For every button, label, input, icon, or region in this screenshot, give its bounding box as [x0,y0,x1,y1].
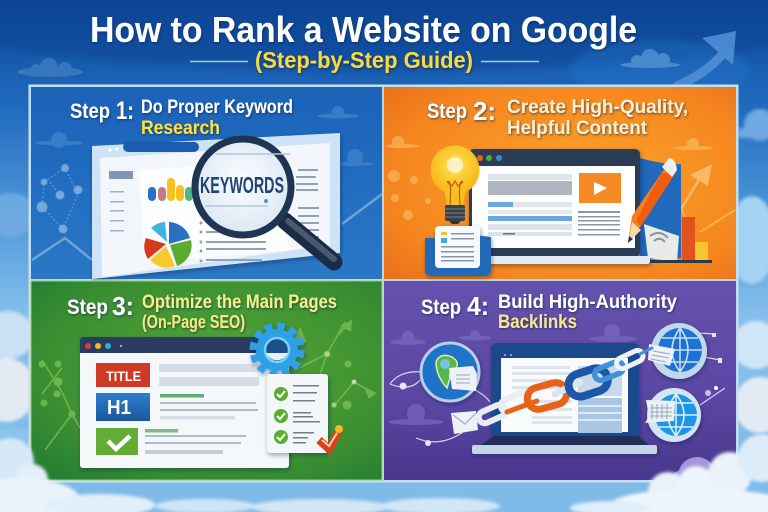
network lines [390,333,725,442]
folder with paper [425,226,491,276]
laptop [465,149,650,264]
step 1 label [70,97,293,139]
panel: step 4 backlinks [384,281,736,495]
step 4 label: Step [421,296,461,319]
document and chart bars [644,217,712,263]
list rows [200,169,319,262]
video thumbnail [579,173,621,203]
step 3 label: Optimize the Main Pages [142,292,337,313]
title tag block: TITLE [106,368,141,384]
panel frame [30,86,738,482]
right bottom globe [647,388,701,442]
side clouds [0,109,768,452]
foreground clouds along the bottom [0,434,768,512]
dashboard window [92,133,340,279]
step 2 label: Step [427,100,467,123]
step 3 label: (On-Page SEO) [142,312,245,332]
panel: step 1 keyword research [31,87,382,279]
blue folder behind laptop [640,158,681,260]
title tag block [96,363,150,387]
step 1 label: 1: [116,97,134,125]
decorative green network [39,320,376,450]
calendar note [645,400,675,423]
step 4 label: Build High-Authority [498,292,677,313]
browser window [80,337,289,468]
right top globe [651,323,707,379]
envelope [451,411,478,434]
content lines on screen [488,174,572,236]
subtitle: (Step-by-Step Guide) [255,47,473,73]
title: How to Rank a Website on Google [90,9,637,50]
magnifying glass: KEYWORDS [200,172,284,198]
step 3 label: 3: [112,291,134,321]
left globe with folder [421,343,479,401]
screen layout [512,366,622,433]
step 1 label: Do Proper Keyword [141,97,293,118]
step 1 label: Research [141,118,220,139]
text rows [145,364,259,454]
panel: step 3 on-page SEO [31,281,382,480]
text lines beside video [578,211,620,236]
step 1 label: Step [70,100,110,123]
gear [253,326,301,374]
checklist card [267,374,328,453]
decorative clouds panel 1 [35,106,374,166]
pencil [628,158,677,243]
H1 block [96,393,150,421]
sidebar [109,171,133,232]
cloud top left [17,58,83,77]
step 3 label [67,291,337,332]
pie chart [144,222,192,268]
top right note [648,344,675,366]
step 2 label: 2: [473,96,496,126]
step 2 label: Helpful Content [507,118,648,139]
decorative elements panel 2 [385,136,735,255]
decorative purple clouds [388,324,637,425]
step 2 label: Create High-Quality, [507,97,688,118]
purple cloud at corner [672,457,716,495]
H1 block: H1 [107,397,131,419]
light bulb [430,146,480,224]
cloud top right [620,49,680,68]
magnifying glass [195,139,334,262]
step 4 label: Backlinks [498,312,577,333]
panel: step 2 content [384,87,736,279]
decorative growth arrow top right [675,31,736,87]
step 2 label [427,96,688,139]
step 4 label: 4: [467,291,489,321]
laptop [472,343,657,454]
decorative network [32,164,382,260]
red check badge [319,425,343,449]
step 4 label [421,291,677,333]
chain [477,348,652,425]
chart card with bars [139,162,292,262]
network nodes [400,333,722,446]
step 3 label: Step [67,296,108,319]
check block [96,428,138,455]
